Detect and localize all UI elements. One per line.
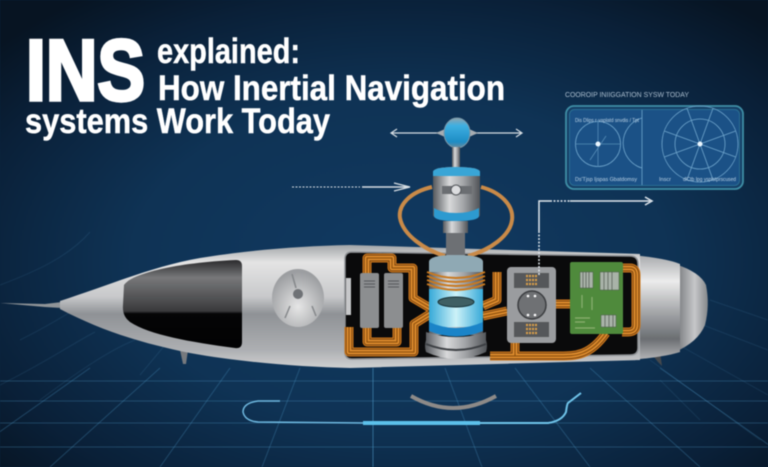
needle probe (0, 302, 62, 308)
green circuit board (570, 262, 623, 334)
floor ring line (243, 393, 581, 423)
arrow: input (292, 183, 410, 191)
gyro ball (444, 118, 470, 148)
missile hull (60, 245, 640, 368)
panel heading: COOROIP INIIGGATION SYSW TODAY (565, 90, 689, 99)
panel captions: Inscr (659, 177, 671, 183)
gyroscope stack (391, 118, 522, 359)
neck (443, 221, 468, 233)
tail section (630, 255, 680, 360)
bay right bracket (636, 288, 640, 312)
glowing glass chamber (429, 289, 483, 327)
orange gimbal ring (400, 187, 512, 256)
panel: navigation display (565, 90, 743, 189)
gyro ball wings (436, 129, 478, 137)
lower jar (429, 255, 483, 335)
arrow: module to display (539, 197, 652, 275)
memory cards (360, 273, 403, 328)
radar scopes (576, 106, 738, 185)
panel captions: Ds'Tjsp Ijspas Gbatdomsy (575, 177, 637, 183)
title word: INS: INS (26, 23, 145, 119)
floor arc (411, 396, 496, 408)
title (25, 23, 505, 141)
panel captions: dlCtb Ipg ysplstprscused (683, 177, 736, 183)
stem (452, 147, 460, 169)
cockpit window (123, 260, 242, 348)
panel frame (566, 106, 743, 189)
upper cylinder (433, 167, 480, 220)
title line: explained: explained: (157, 32, 300, 71)
landing legs (180, 350, 662, 366)
gauge dial (272, 269, 324, 327)
perspective grid (0, 368, 768, 467)
speed streaks (0, 232, 768, 440)
panel captions (575, 118, 736, 183)
title line: systems Work Today: systems Work Today (25, 102, 330, 141)
base (425, 332, 487, 359)
coil windings (427, 272, 485, 290)
tail cap (675, 264, 708, 352)
title line: How Inertial Navigation: How Inertial Navigation (158, 69, 505, 108)
electronics module (507, 267, 556, 343)
internal bay (345, 252, 638, 359)
panel captions: Dis Dlips r·vaplatd snvdis / Tpt (575, 118, 639, 124)
bay side bracket (346, 278, 351, 315)
top arrows (391, 129, 522, 137)
orange wiring (349, 258, 636, 356)
